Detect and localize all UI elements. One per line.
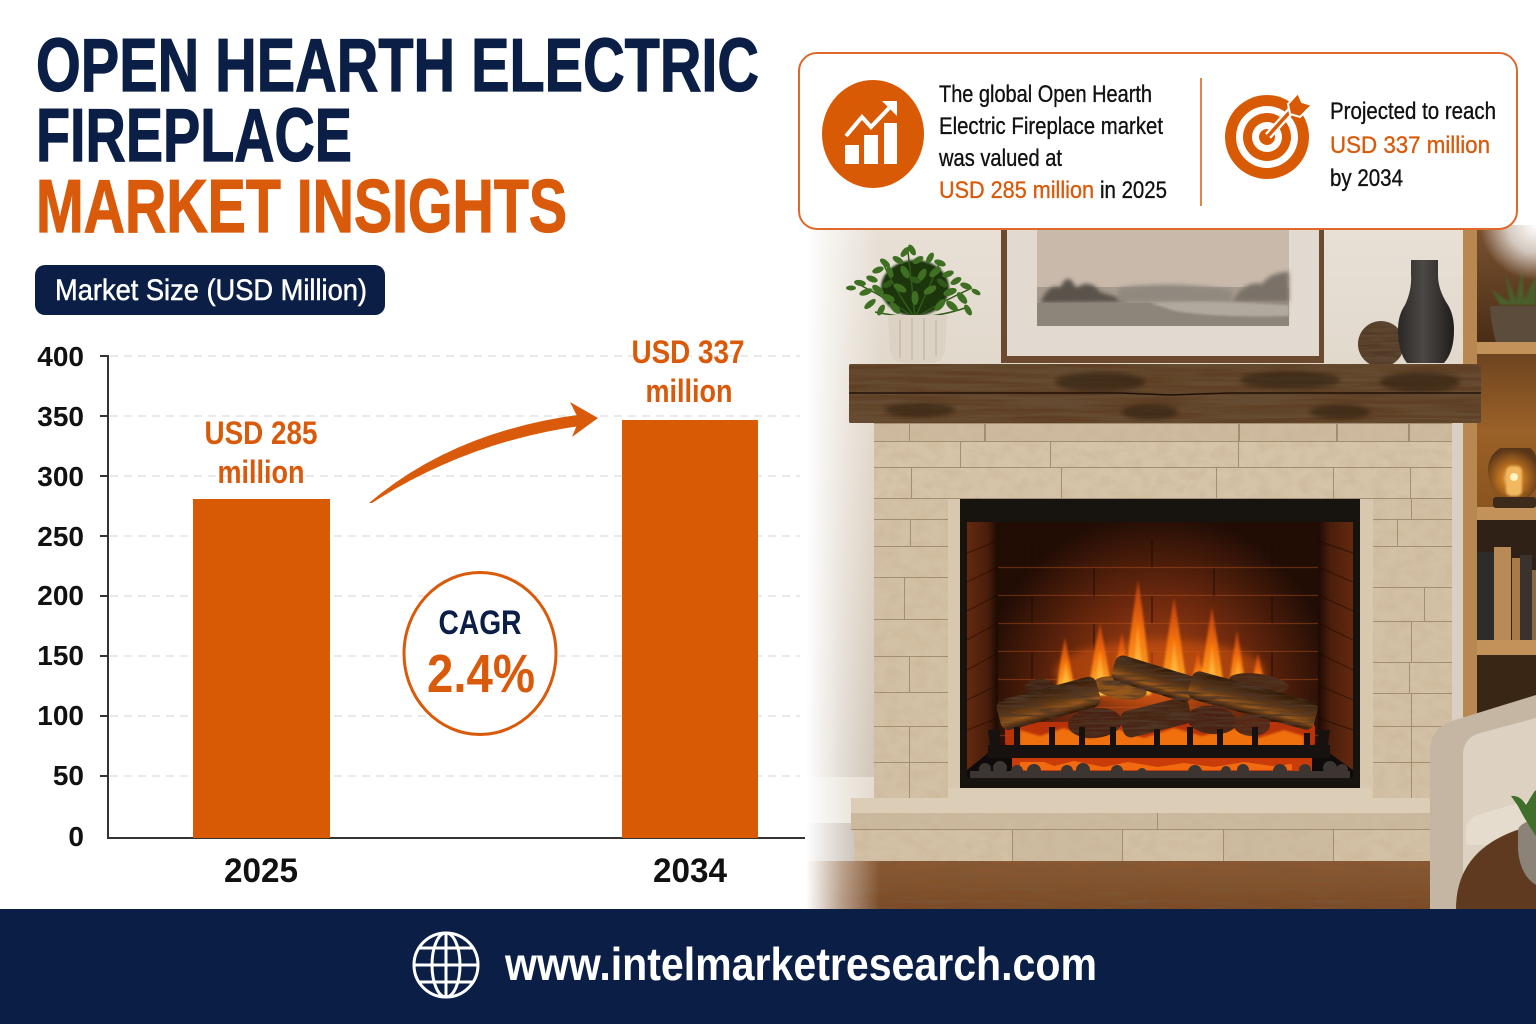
valuation text: Electric Fireplace market: [939, 113, 1163, 140]
stone hearth: [851, 788, 1430, 861]
y axis labels: 50: [53, 760, 84, 791]
CAGR badge: [404, 572, 556, 734]
front left log: [995, 675, 1102, 732]
x axis labels: 2034: [653, 852, 727, 890]
wall: [790, 225, 1536, 865]
front centre log: [1119, 696, 1193, 739]
armchair: [1430, 695, 1536, 909]
top right log: [1186, 670, 1319, 731]
grate: [988, 727, 1330, 758]
value label 2025: USD 285: [204, 415, 318, 451]
foreground plant: [1511, 790, 1536, 885]
bar 2025: [193, 499, 330, 838]
top centre log: [1110, 654, 1198, 704]
light wall strip: [1452, 423, 1463, 799]
y axis labels: [37, 341, 84, 852]
valuation text: was valued at: [938, 145, 1062, 172]
logs: [995, 654, 1319, 740]
stone surround: [874, 423, 1452, 799]
y axis labels: 0: [68, 821, 84, 852]
y axis labels: 200: [37, 580, 84, 611]
value label 2025: million: [218, 454, 304, 490]
y axis labels: 250: [37, 521, 84, 552]
left fade: [785, 225, 880, 909]
stone reveals: [948, 499, 960, 798]
title: MARKET INSIGHTS: [36, 164, 567, 248]
market size pill heading: Market Size (USD Million): [55, 274, 367, 307]
website url: www.intelmarketresearch.com: [504, 938, 1097, 990]
growth arrow: [369, 402, 598, 503]
back log chunks: [1025, 679, 1055, 695]
framed landscape picture: [1001, 225, 1324, 363]
CAGR badge: CAGR: [438, 604, 522, 642]
y axis labels: 350: [37, 401, 84, 432]
projection text: USD 337 million: [1330, 132, 1490, 159]
title: FIREPLACE: [36, 93, 352, 177]
grid lines: [110, 356, 800, 776]
y axis labels: 100: [37, 700, 84, 731]
side table: [1456, 827, 1536, 909]
valuation text: [938, 81, 1167, 204]
small front logs: [1067, 706, 1123, 740]
value label 2034: million: [646, 373, 732, 409]
y axis labels: 300: [37, 461, 84, 492]
projection text: Projected to reach: [1330, 98, 1496, 125]
icon: growth chart: [822, 80, 924, 188]
glowing embers and coals: [1012, 758, 1312, 772]
potted plant on mantel: [846, 243, 982, 363]
valuation text: USD 285 million: [939, 177, 1094, 204]
shelf plant: [1490, 268, 1536, 342]
glowing lantern: [1488, 448, 1536, 508]
rustic wood mantel: [849, 364, 1481, 423]
flame glow: [1055, 640, 1265, 704]
value label 2025: [204, 415, 318, 490]
floor: [790, 861, 1536, 909]
left stone column: [874, 499, 948, 798]
bar chart: [37, 334, 805, 890]
valuation text: The global Open Hearth: [939, 81, 1152, 108]
projection text: [1330, 98, 1496, 192]
icon: target: [1225, 93, 1312, 179]
title: OPEN HEARTH ELECTRIC: [36, 23, 759, 107]
bar 2034: [622, 420, 758, 838]
value label 2034: USD 337: [632, 334, 744, 370]
footer band: [0, 909, 1536, 1024]
dark vase: [1398, 260, 1454, 363]
ember bed: [1005, 722, 1315, 748]
decorative ball: [1358, 321, 1404, 367]
CAGR badge: 2.4%: [427, 644, 535, 704]
top right fade: [1480, 225, 1536, 280]
y axis labels: 400: [37, 341, 84, 372]
projection text: by 2034: [1330, 165, 1403, 192]
firebox: [960, 499, 1360, 788]
icon: globe: [414, 933, 478, 997]
x axis labels: 2025: [224, 852, 298, 890]
y axis labels: 150: [37, 640, 84, 671]
axes: [100, 355, 805, 838]
title: [36, 23, 759, 248]
x axis labels: [224, 852, 727, 890]
firebox frame: [960, 499, 1360, 522]
middle back log: [1092, 672, 1148, 704]
flames: [1056, 580, 1266, 695]
right stone column: [1373, 499, 1452, 798]
callout panel: [799, 53, 1517, 229]
bookshelf: [1463, 225, 1536, 725]
baseboard: [790, 777, 890, 823]
firebox back wall: [998, 522, 1318, 747]
fireplace photo scene: [785, 225, 1536, 909]
value label 2034: [632, 334, 744, 409]
firebox side walls: [967, 522, 998, 770]
market size pill heading: [35, 265, 385, 315]
valuation text: in 2025: [1100, 177, 1167, 204]
books: [1477, 547, 1536, 640]
